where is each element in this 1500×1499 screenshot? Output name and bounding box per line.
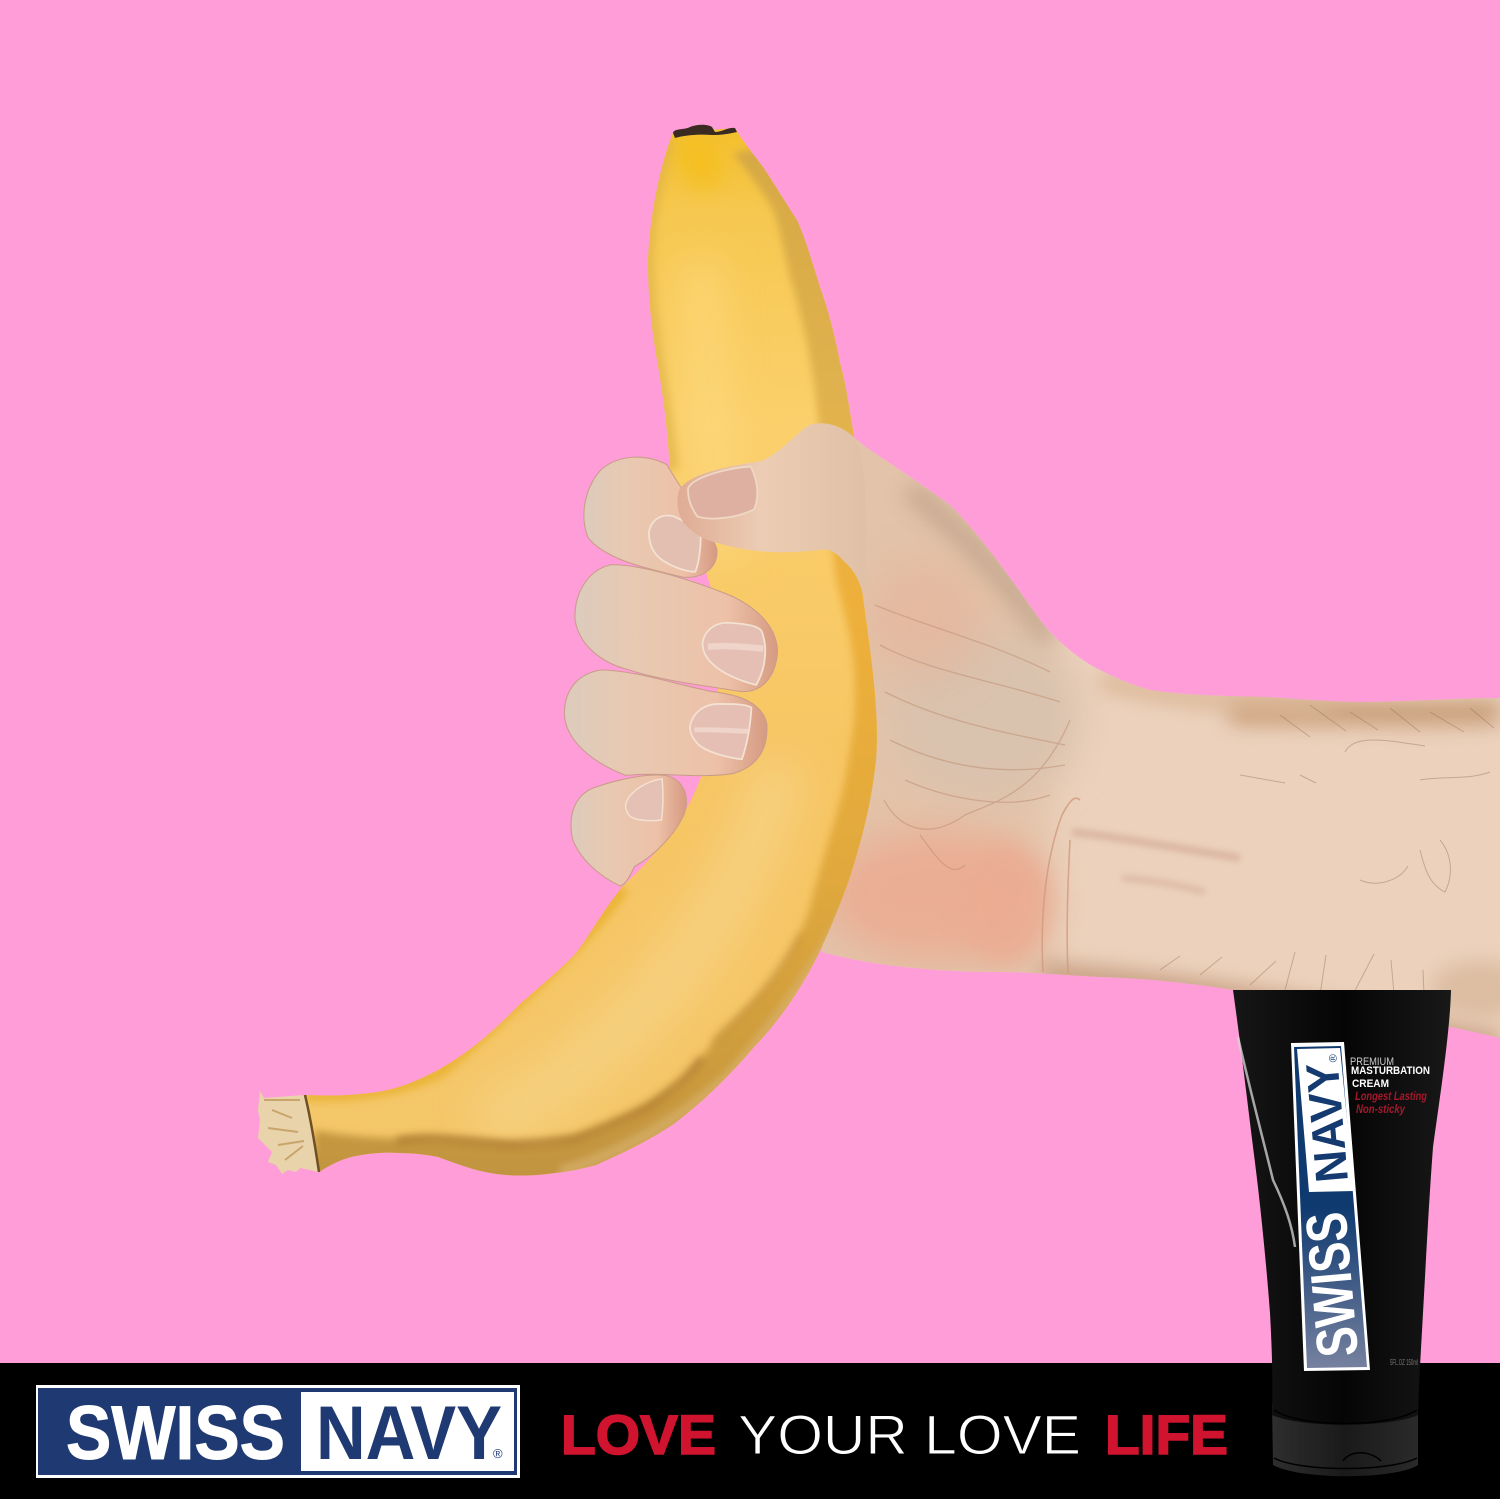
logo registered mark: ® (493, 1446, 503, 1461)
tube cap (1272, 1405, 1418, 1476)
palm creases (875, 605, 1070, 870)
thin upper ridge line (714, 935, 800, 1040)
tube registered mark: ® (1327, 1054, 1340, 1063)
tube volume text: 5FL.OZ 150ml (1390, 1358, 1418, 1367)
wrist creases (1042, 798, 1080, 974)
thumb (677, 423, 866, 595)
fingers and thumb (564, 423, 866, 886)
tube product name: MASTURBATION (1351, 1065, 1430, 1077)
middle finger (575, 565, 777, 692)
banana (258, 124, 877, 1176)
tagline YOUR LOVE: YOUR LOVE (738, 1403, 1081, 1466)
shaded ridge band (314, 148, 877, 1176)
arm hairs (1160, 705, 1494, 1020)
index finger (584, 457, 717, 577)
tube label navy (1294, 1046, 1367, 1368)
tube body (1233, 990, 1451, 1425)
tagline (561, 1403, 1228, 1466)
tube SWISS text: SWISS (1294, 1209, 1371, 1360)
logo SWISS: SWISS (66, 1391, 285, 1476)
banana stem end (258, 1091, 319, 1174)
ring finger (564, 670, 767, 776)
outer highlight (560, 905, 849, 1172)
hand palm and forearm (821, 437, 1500, 1038)
black footer bar (0, 1363, 1500, 1499)
tube product name line 2: CREAM (1352, 1078, 1389, 1090)
swiss navy logo (36, 1385, 520, 1478)
tagline LIFE: LIFE (1105, 1403, 1228, 1466)
tagline LOVE: LOVE (561, 1403, 716, 1466)
tube label frame (1291, 1042, 1370, 1371)
tube cap details (1274, 1410, 1417, 1468)
body highlights (700, 260, 725, 560)
tube highlight (1238, 1037, 1295, 1247)
tube claim two: Non-sticky (1356, 1102, 1406, 1116)
tube PREMIUM text: PREMIUM (1350, 1056, 1394, 1068)
tube claim one: Longest Lasting (1355, 1089, 1428, 1103)
banana tip (673, 125, 737, 138)
tube NAVY text: NAVY (1296, 1061, 1358, 1185)
logo NAVY: NAVY (316, 1391, 502, 1476)
left edge shade (647, 140, 672, 470)
tube label white panel (1297, 1048, 1354, 1192)
dark ridge line (400, 1060, 700, 1144)
little finger (571, 775, 686, 886)
wrist markings (1072, 832, 1240, 892)
product tube (1233, 990, 1451, 1476)
